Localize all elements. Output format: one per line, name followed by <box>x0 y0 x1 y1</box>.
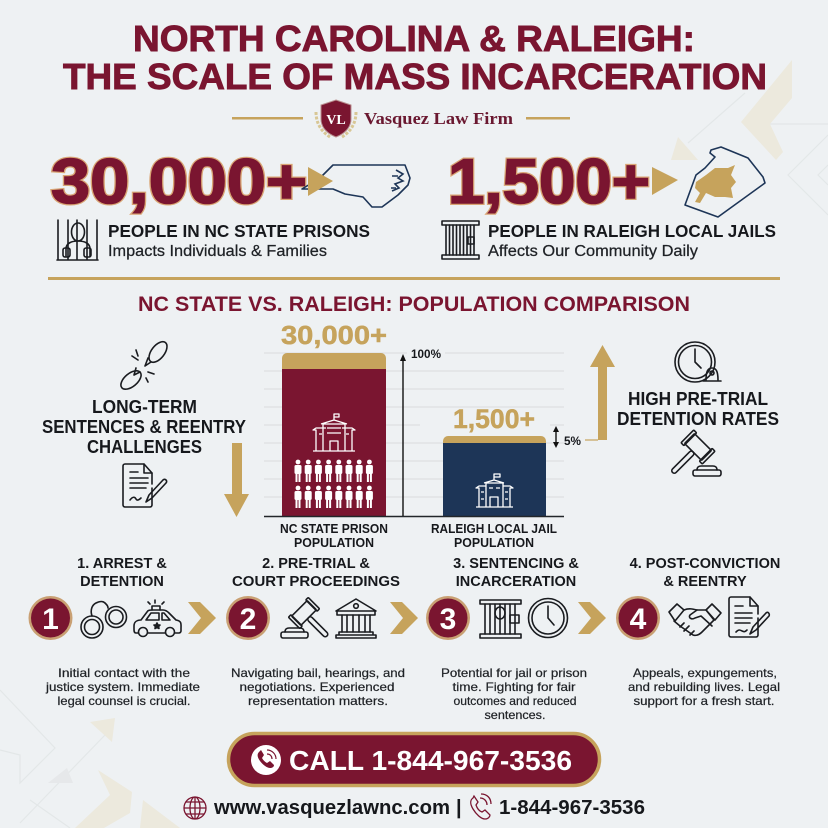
step 1: arrest and detention <box>28 556 216 708</box>
logo: Vasquez Law Firm <box>232 100 570 137</box>
icon: document and pen <box>729 597 769 637</box>
badge 3 <box>426 596 470 640</box>
category labels: POPULATION <box>454 535 534 550</box>
value labels: 100% <box>411 347 441 361</box>
description 3 <box>441 666 587 722</box>
stat: 1,500+: 1,500+ <box>448 147 650 217</box>
description 2 <box>231 666 405 708</box>
heading: population comparison: NC STATE VS. RALEIGH: POPULATION COMPARISON <box>138 293 690 316</box>
footer contact line: | <box>456 797 462 819</box>
value labels <box>281 320 581 448</box>
step 3: sentencing and incarceration: 3. SENTENCING & <box>453 556 579 572</box>
text: people in Raleigh local jails: PEOPLE IN RALEIGH LOCAL JAILS <box>488 221 776 241</box>
icon: courthouse <box>336 599 376 638</box>
axis <box>264 354 564 516</box>
text: high pre-trial detention rates: DETENTION RATES <box>617 408 779 429</box>
icon: jail cell <box>442 221 479 259</box>
title <box>63 18 767 97</box>
stat: 1,500+: 1,500+ <box>448 147 650 217</box>
icon: gavel and block <box>281 597 337 646</box>
stat: 30,000+: 30,000+ <box>51 147 307 217</box>
text: people in NC state prisons <box>108 221 370 260</box>
text: long-term sentences and reentry challenges: CHALLENGES <box>87 437 202 457</box>
badge 4: 4 <box>630 603 647 636</box>
badge 1 <box>28 596 72 640</box>
badge 4 <box>616 596 660 640</box>
description 3: time. Fighting for fair <box>452 680 576 694</box>
icon: jail bars <box>480 600 521 638</box>
text: high pre-trial detention rates <box>617 388 779 429</box>
icon: police car <box>134 600 181 636</box>
logo: Vasquez Law Firm: VL <box>326 113 346 128</box>
step 2: pre-trial and court proceedings <box>226 556 418 708</box>
value labels: 5% <box>564 434 581 448</box>
bar: Raleigh local jail <box>443 436 546 516</box>
description 2: negotiations. Experienced <box>240 680 394 694</box>
icon: broken chain <box>118 339 171 393</box>
category labels <box>280 521 557 550</box>
footer contact line: 1-844-967-3536 <box>499 797 645 819</box>
text: people in Raleigh local jails: Affects Our Community Daily <box>488 243 698 260</box>
description 1 <box>45 666 200 708</box>
icon: signed document <box>123 464 167 507</box>
footer contact line <box>184 794 645 819</box>
step 1: arrest and detention: DETENTION <box>80 574 164 590</box>
description 4: Appeals, expungements, <box>633 666 777 680</box>
badge 3: 3 <box>440 603 456 636</box>
description 1: Initial contact with the <box>58 666 190 680</box>
step 2: pre-trial and court proceedings: COURT PROCEEDINGS <box>232 574 400 590</box>
category labels: RALEIGH LOCAL JAIL <box>431 521 557 536</box>
value labels: 1,500+ <box>453 404 535 434</box>
arrow: down <box>224 443 249 517</box>
description 1: legal counsel is crucial. <box>58 694 190 708</box>
chevron <box>578 602 606 634</box>
text: people in Raleigh local jails <box>488 221 776 260</box>
step 3: sentencing and incarceration: INCARCERATION <box>456 574 576 590</box>
chevron <box>390 602 418 634</box>
description 3: sentences. <box>484 708 546 722</box>
text: high pre-trial detention rates: HIGH PRE-TRIAL <box>628 388 768 409</box>
text: long-term sentences and reentry challenges <box>42 397 246 457</box>
step 4: post-conviction and reentry <box>616 556 780 708</box>
step 3: sentencing and incarceration <box>426 556 606 722</box>
text: people in NC state prisons: Impacts Individuals & Families <box>108 243 327 260</box>
stat: 30,000+: 30,000+ <box>51 147 307 217</box>
text: long-term sentences and reentry challenges: LONG-TERM <box>92 397 197 417</box>
icon: prison bars with person <box>57 220 98 260</box>
icon: wall clock <box>528 598 568 638</box>
footer contact line: www.vasquezlawnc.com <box>213 797 450 819</box>
description 4: and rebuilding lives. Legal <box>628 680 780 694</box>
icon: phone in circle <box>251 745 281 775</box>
description 4 <box>628 666 780 708</box>
description 1: justice system. Immediate <box>45 680 200 694</box>
value labels: 30,000+ <box>281 320 387 350</box>
badge 2: 2 <box>240 603 256 636</box>
description 3: Potential for jail or prison <box>441 666 587 680</box>
bar: NC state prison <box>282 353 386 516</box>
call to action button: CALL 1-844-967-3536 <box>289 745 572 776</box>
description 2: Navigating bail, hearings, and <box>231 666 405 680</box>
description 3: outcomes and reduced <box>454 694 576 708</box>
badge 2 <box>226 596 270 640</box>
title: THE SCALE OF MASS INCARCERATION <box>63 56 767 97</box>
badge 1: 1 <box>42 603 59 636</box>
chevron <box>188 602 216 634</box>
text: long-term sentences and reentry challenges: SENTENCES & REENTRY <box>42 417 246 437</box>
icon: NC map with arrow <box>302 165 410 207</box>
step 2: pre-trial and court proceedings: 2. PRE-TRIAL & <box>262 556 370 572</box>
step 4: post-conviction and reentry: & REENTRY <box>663 574 747 590</box>
text: people in NC state prisons: PEOPLE IN NC STATE PRISONS <box>108 221 370 241</box>
call to action button <box>228 734 600 786</box>
step 1: arrest and detention: 1. ARREST & <box>77 556 167 572</box>
icon: globe <box>184 797 206 819</box>
description 2: representation matters. <box>248 694 388 708</box>
logo: Vasquez Law Firm: Vasquez Law Firm <box>364 109 513 128</box>
step 4: post-conviction and reentry: 4. POST-CONVICTION <box>630 556 780 572</box>
icon: handcuffs <box>81 602 126 638</box>
category labels: POPULATION <box>294 535 374 550</box>
description 4: support for a fresh start. <box>634 694 774 708</box>
arrow: up <box>585 345 615 440</box>
icon: phone <box>471 794 491 819</box>
category labels: NC STATE PRISON <box>280 521 388 536</box>
icon: gavel <box>662 430 721 483</box>
title: NORTH CAROLINA & RALEIGH: <box>133 18 695 59</box>
bar chart: NC state vs Raleigh <box>264 320 581 550</box>
icon: Raleigh map with arrow <box>652 147 765 217</box>
icon: clock with bail bell <box>675 342 721 382</box>
icon: handshake <box>669 604 721 635</box>
